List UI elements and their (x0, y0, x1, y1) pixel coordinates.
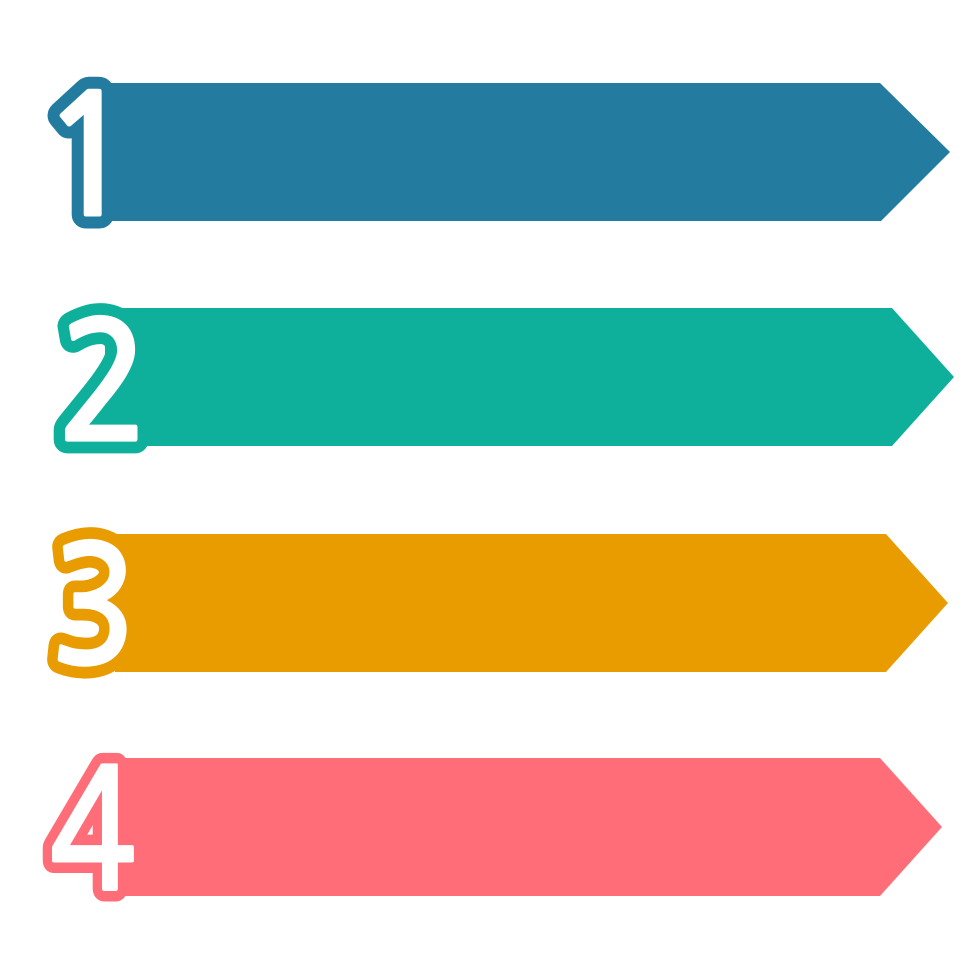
item 4: coral arrow with number (48, 750, 942, 916)
arrow bar 2 (105, 308, 954, 446)
arrow bar 1 (105, 83, 950, 221)
number 1: 1 (38, 76, 140, 242)
item 3: amber arrow with number (49, 527, 948, 690)
arrow bar 4 (125, 758, 942, 896)
number 3: 3 (49, 527, 139, 690)
item 1: blue arrow with number (38, 76, 950, 242)
item 2: teal arrow with number (56, 303, 954, 467)
number 4: 4 (48, 750, 138, 916)
arrow bar 3 (115, 534, 948, 672)
number 2: 2 (56, 303, 152, 467)
